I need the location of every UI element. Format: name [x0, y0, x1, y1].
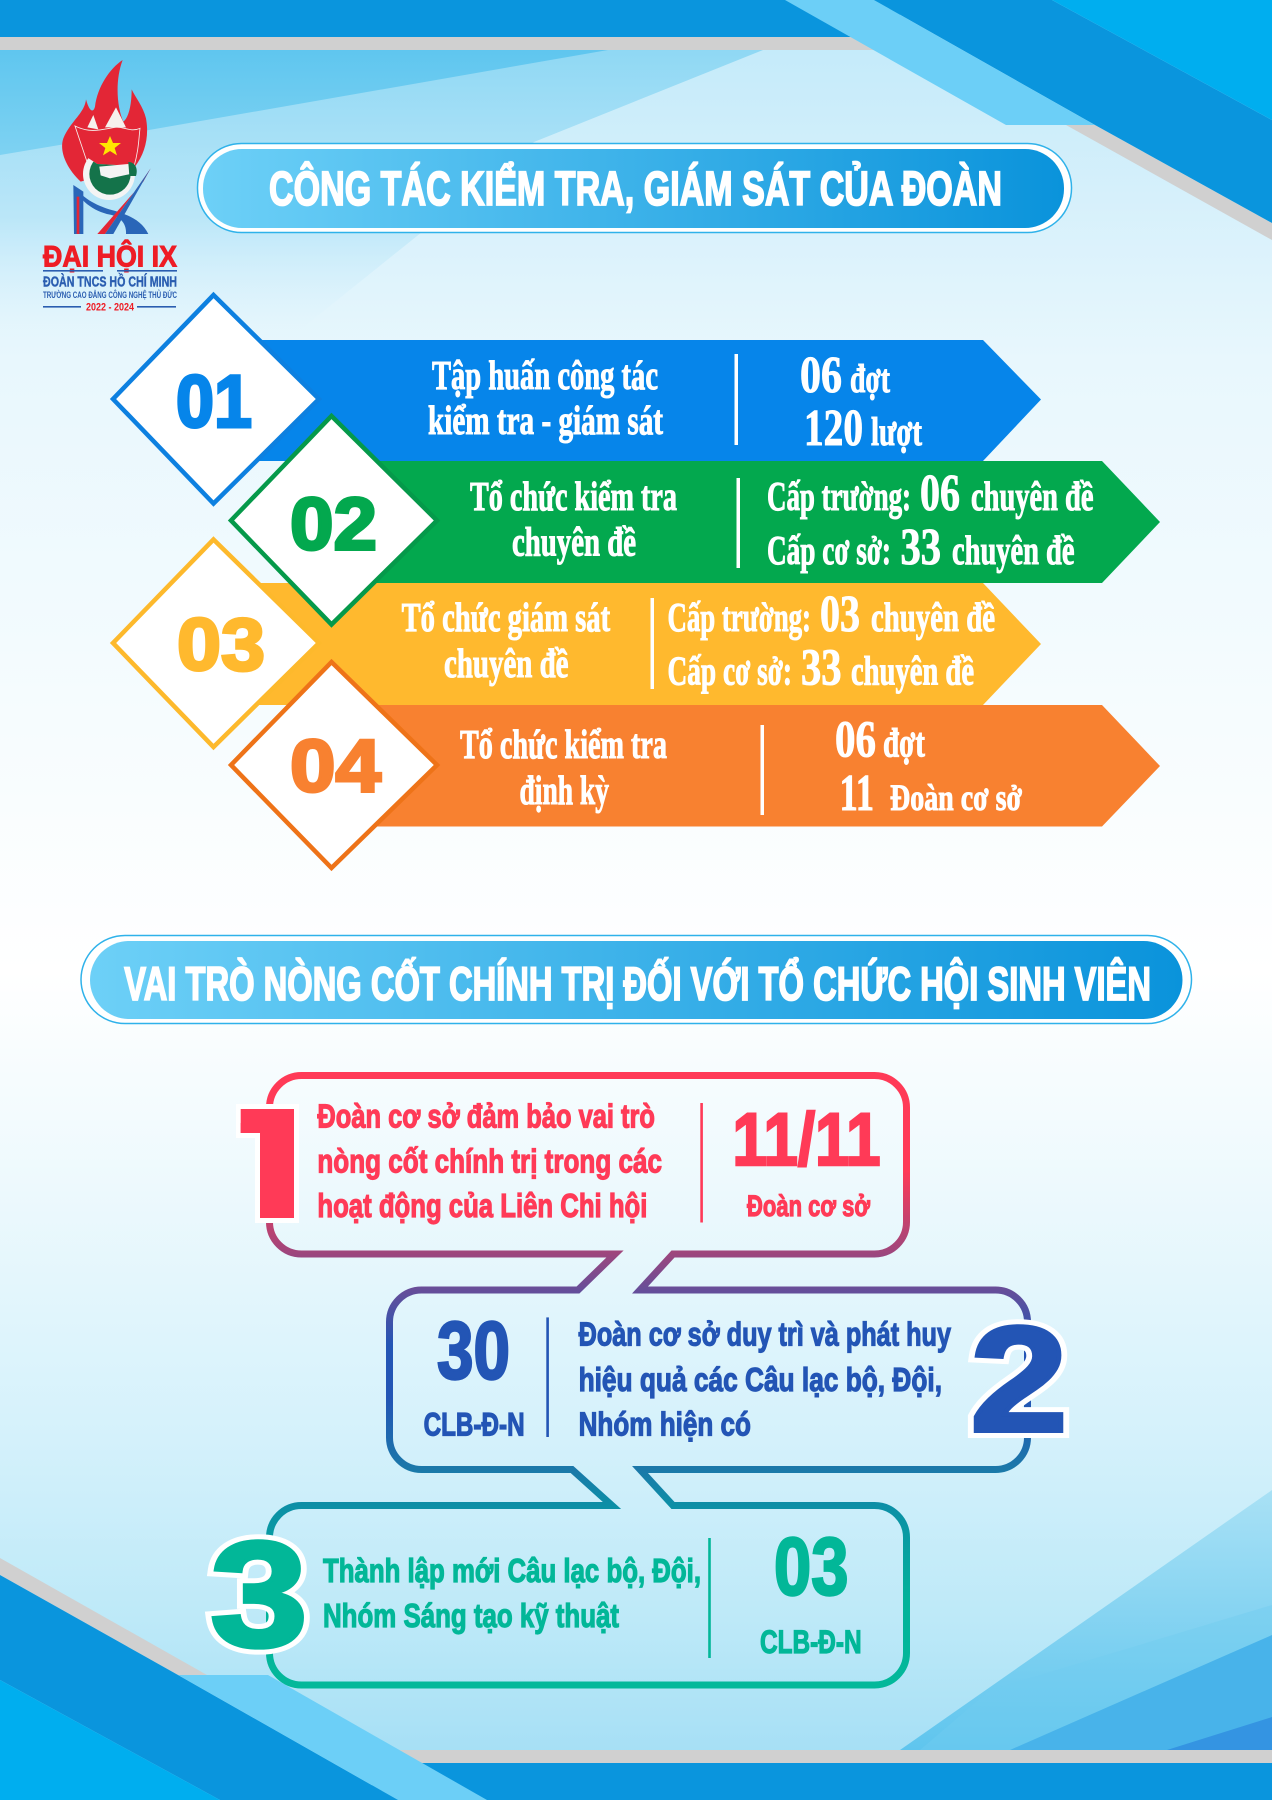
- bar 3: Cấp trường:: [668, 594, 811, 640]
- callout 1: Đoàn cơ sở: [747, 1190, 870, 1223]
- bar 4: Đoàn cơ sở: [890, 778, 1022, 819]
- callout 2: Đoàn cơ sở duy trì và phát huy: [579, 1316, 951, 1353]
- bar 2: Cấp cơ sở:: [767, 527, 891, 573]
- bar 3: chuyên đề: [851, 648, 974, 694]
- callout 2: Nhóm hiện có: [579, 1406, 751, 1443]
- bar 1: đợt: [850, 356, 890, 401]
- logo text: ĐOÀN TNCS HỒ CHÍ MINH: [43, 273, 177, 291]
- bar 3: Tổ chức giám sát: [402, 594, 610, 640]
- bar 4: 06: [835, 712, 876, 768]
- bar 3: [230, 583, 1041, 705]
- callout 3: Thành lập mới Câu lạc bộ, Đội,: [323, 1552, 701, 1589]
- icon: flame emblem: [62, 60, 151, 234]
- callout 3: Nhóm Sáng tạo kỹ thuật: [323, 1597, 619, 1634]
- bar 2: Cấp trường:: [767, 473, 911, 519]
- diamond 01: 01: [176, 360, 252, 443]
- bottom corner band: [0, 1558, 1272, 1800]
- bar 2: chuyên đề: [512, 518, 636, 564]
- number 2: 2: [970, 1295, 1068, 1463]
- logo text: ĐẠI HỘI IX: [43, 240, 177, 274]
- bar 3: 33: [801, 640, 842, 696]
- heading: công tác kiểm tra: CÔNG TÁC KIỂM TRA, GIÁM SÁT CỦA ĐOÀN: [269, 161, 1002, 216]
- number 1: [236, 1104, 299, 1223]
- callout 2: [424, 1295, 1068, 1463]
- logo text: 2022 - 2024: [86, 302, 135, 314]
- logo: Đại hội IX: [43, 60, 177, 314]
- diamond 02: 02: [290, 482, 377, 565]
- bar 1: lượt: [871, 409, 922, 454]
- callout 2: CLB-Đ-N: [424, 1407, 525, 1443]
- number 2: 2: [970, 1295, 1068, 1463]
- bar 3: chuyên đề: [871, 594, 995, 640]
- top corner band: [0, 0, 1272, 240]
- bar 4: Tổ chức kiểm tra: [460, 721, 667, 767]
- callout 1: Đoàn cơ sở đảm bảo vai trò: [317, 1098, 655, 1134]
- bar 2: chuyên đề: [952, 527, 1074, 573]
- diamond 04: 04: [290, 725, 381, 808]
- number 3: 3: [210, 1510, 308, 1678]
- bar 4: đợt: [883, 720, 925, 766]
- number 1: 1: [222, 1079, 306, 1249]
- bar 3: chuyên đề: [444, 640, 568, 686]
- callout 1: [222, 1079, 880, 1249]
- bar 1: Tập huấn công tác: [432, 352, 658, 398]
- bar 2: [340, 461, 1160, 583]
- bar 2: 06: [920, 465, 960, 522]
- bar 1: 120: [804, 400, 863, 457]
- callout 3: CLB-Đ-N: [760, 1624, 862, 1660]
- callout 1: 11/11: [732, 1098, 880, 1181]
- connected callout outline: [270, 1076, 1028, 1685]
- callout 1: hoạt động của Liên Chi hội: [317, 1187, 647, 1224]
- callout 1: nòng cốt chính trị trong các: [317, 1143, 662, 1180]
- bar 4: [340, 705, 1160, 826]
- bar 4: 11: [840, 765, 874, 822]
- callout 2: hiệu quả các Câu lạc bộ, Đội,: [579, 1361, 942, 1398]
- bar 2: Tổ chức kiểm tra: [470, 473, 677, 519]
- diamond 03: [113, 540, 319, 747]
- callout 2: 30: [437, 1306, 510, 1396]
- bar 2: chuyên đề: [971, 473, 1094, 519]
- bar 3: 03: [820, 586, 860, 643]
- callout 3: [210, 1510, 862, 1678]
- diamond 04: [231, 662, 437, 868]
- logo text: [43, 240, 177, 314]
- bar 1: 06: [800, 347, 842, 404]
- logo text: TRƯỜNG CAO ĐẲNG CÔNG NGHỆ THỦ ĐỨC: [43, 289, 177, 301]
- bar 1: kiểm tra - giám sát: [428, 397, 663, 443]
- diamond 01: [113, 295, 319, 504]
- number 3: 3: [210, 1510, 308, 1678]
- number 1: 1: [222, 1079, 306, 1249]
- diamond 02: [231, 416, 437, 624]
- heading: công tác kiểm tra: [198, 144, 1072, 232]
- heading: vai trò nòng cốt: [81, 936, 1192, 1024]
- bar 2: 33: [900, 519, 941, 576]
- callout 3: 03: [774, 1522, 848, 1612]
- diamond 03: 03: [177, 603, 265, 686]
- bar 3: Cấp cơ sở:: [668, 648, 792, 694]
- bar 1: [230, 340, 1041, 461]
- bar 4: định kỳ: [520, 767, 609, 813]
